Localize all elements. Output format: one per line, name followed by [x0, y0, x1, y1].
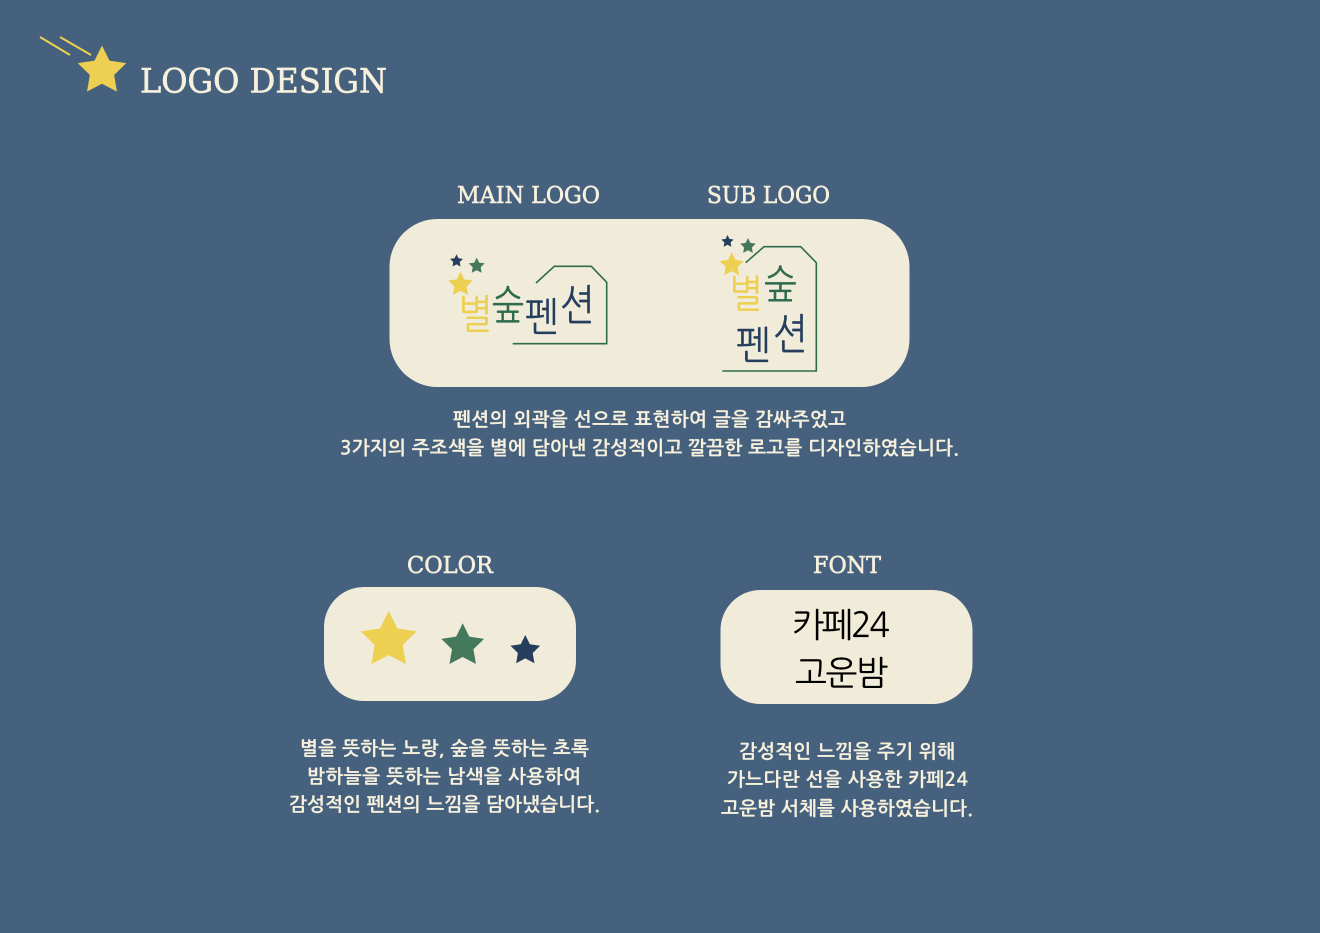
text: color description: 별을 뜻하는 노랑, 숲을 뜻하는 초록: [300, 738, 589, 758]
text: color description: 밤하늘을 뜻하는 남색을 사용하여: [307, 766, 581, 786]
title: LOGO DESIGN: [140, 62, 387, 102]
text: font description: 고운밤 서체를 사용하였습니다.: [721, 798, 973, 818]
heading: font: FONT: [813, 553, 882, 579]
icon: green star: [441, 623, 484, 664]
text: logo description: 펜션의 외곽을 선으로 표현하여 글을 감싸주었고: [453, 409, 846, 429]
text: font description: 가느다란 선을 사용한 카페24: [727, 769, 968, 789]
sub logo: 숲: [764, 265, 797, 304]
main logo: 펜: [525, 297, 559, 337]
icon: yellow star: [361, 611, 417, 664]
panel: font: 카페24: [792, 608, 890, 642]
icon: shooting star: [40, 37, 126, 92]
text: logo description: [340, 409, 959, 458]
heading: color: COLOR: [407, 553, 494, 579]
main logo: 숲: [492, 286, 524, 325]
heading: main logo: MAIN LOGO: [457, 183, 600, 209]
heading: sub logo: SUB LOGO: [707, 183, 830, 209]
main logo: [448, 254, 607, 344]
main logo: 션: [560, 284, 595, 326]
main logo: 별: [458, 294, 493, 334]
sub logo: 션: [773, 313, 808, 355]
icon: navy star: [510, 635, 540, 663]
panel: font: [720, 590, 972, 704]
text: logo description: 3가지의 주조색을 별에 담아낸 감성적이고 깔끔한 로고를 디자인하였습니다.: [340, 438, 959, 458]
text: font description: [721, 741, 973, 818]
sub logo: 별: [729, 275, 763, 313]
panel: color: [324, 587, 576, 701]
sub logo: 펜: [736, 326, 771, 365]
panel: font: 고운밤: [795, 656, 888, 690]
text: color description: 감성적인 펜션의 느낌을 담아냈습니다.: [289, 794, 600, 814]
panel: logos: [390, 219, 910, 387]
text: color description: [289, 738, 600, 814]
sub logo: [720, 235, 816, 371]
text: font description: 감성적인 느낌을 주기 위해: [739, 741, 955, 761]
